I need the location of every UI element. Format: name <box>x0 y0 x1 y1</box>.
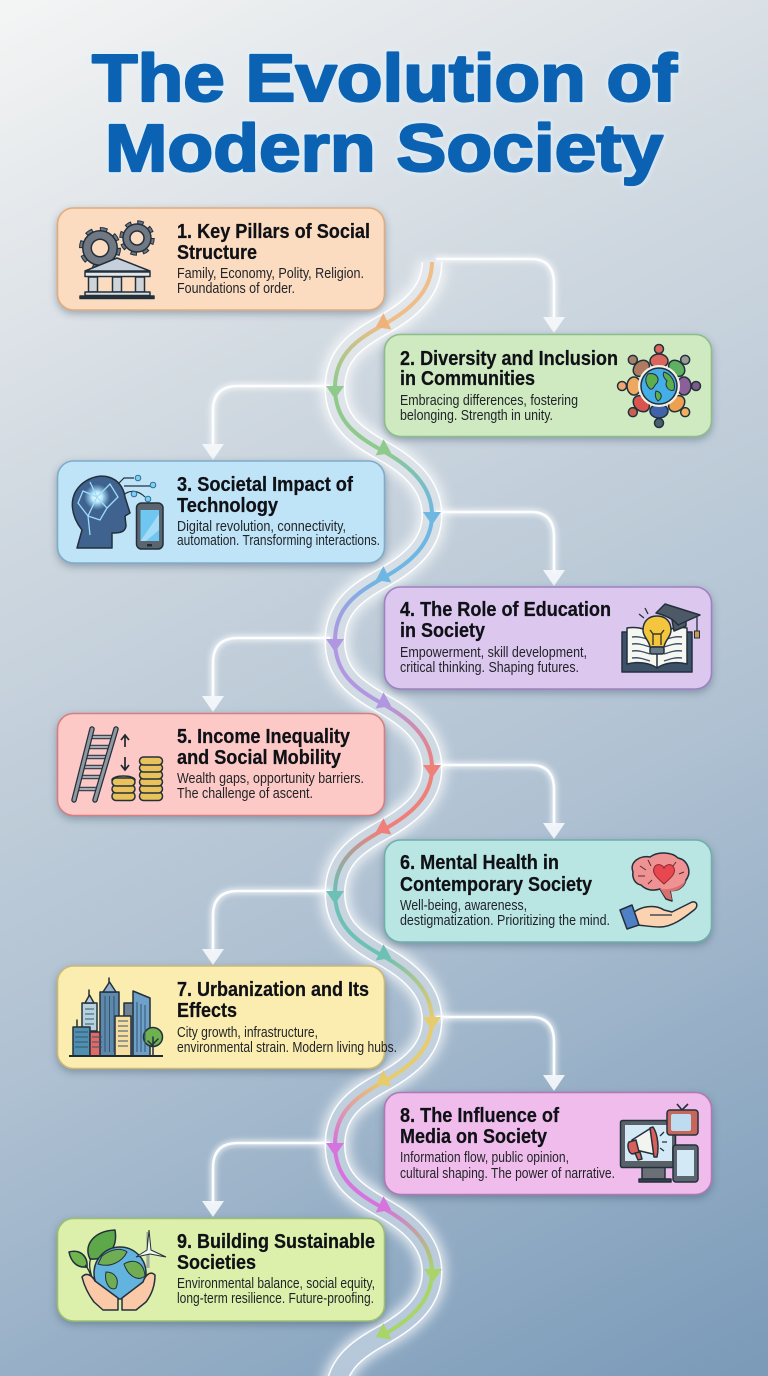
heading <box>177 978 369 1022</box>
title <box>92 41 678 186</box>
panel: 1 Key Pillars <box>58 208 384 310</box>
icon: gears and pillared building <box>80 224 154 298</box>
description: Digital revolution, connectivity, <box>177 519 346 535</box>
heading <box>400 1104 559 1148</box>
heading: 3. Societal Impact of <box>177 473 353 496</box>
heading: 1. Key Pillars of Social <box>177 220 370 243</box>
heading: in Society <box>400 619 486 642</box>
title: The Evolution of <box>92 41 678 116</box>
heading: 4. The Role of Education <box>400 598 611 621</box>
title: Modern Society <box>105 111 663 186</box>
icon: ladder and coin stacks <box>74 729 162 800</box>
icon: city skyline and tree <box>69 978 163 1057</box>
description <box>177 771 364 802</box>
description: Empowerment, skill development, <box>400 645 587 661</box>
heading: Media on Society <box>400 1125 548 1148</box>
icon: book, light bulb and graduation cap <box>622 604 700 672</box>
description: The challenge of ascent. <box>177 786 313 802</box>
description: destigmatization. Prioritizing the mind. <box>400 913 610 929</box>
panel: 2 Diversity and Inclusion <box>384 334 712 436</box>
panel: 9 Sustainable Societies <box>58 1218 384 1321</box>
coloured flow line with arrowheads <box>326 262 442 1345</box>
description: Foundations of order. <box>177 281 295 297</box>
title: The Evolution of <box>92 41 678 116</box>
heading: Contemporary Society <box>400 873 593 896</box>
heading <box>177 1230 375 1274</box>
description: Well-being, awareness, <box>400 898 527 914</box>
description: Embracing differences, fostering <box>400 393 578 409</box>
description <box>400 1150 615 1182</box>
heading: Effects <box>177 999 237 1022</box>
heading <box>177 725 351 769</box>
icon: digital head and smartphone <box>72 475 163 549</box>
heading <box>400 598 611 642</box>
description: belonging. Strength in unity. <box>400 408 553 424</box>
heading: 9. Building Sustainable <box>177 1230 375 1253</box>
winding ribbon path <box>335 262 432 1376</box>
heading: Technology <box>177 494 279 517</box>
description: environmental strain. Modern living hubs. <box>177 1040 397 1056</box>
connector arrows <box>202 259 565 1217</box>
heading: 7. Urbanization and Its <box>177 978 369 1001</box>
heading <box>400 851 593 896</box>
description <box>177 1025 397 1056</box>
panel: 5 Income Inequality <box>58 714 384 816</box>
heading: 6. Mental Health in <box>400 851 559 874</box>
heading: Structure <box>177 241 257 264</box>
heading: Societies <box>177 1251 256 1274</box>
description <box>400 645 587 676</box>
heading: in Communities <box>400 367 535 390</box>
description: Family, Economy, Polity, Religion. <box>177 266 364 282</box>
heading: 8. The Influence of <box>400 1104 559 1127</box>
description: cultural shaping. The power of narrative. <box>400 1166 615 1182</box>
panel: 6 Mental Health <box>384 840 712 942</box>
heading: 5. Income Inequality <box>177 725 351 748</box>
description: City growth, infrastructure, <box>177 1025 318 1041</box>
panel: 8 Media <box>384 1092 712 1194</box>
icon: brain with heart above a hand <box>620 853 697 929</box>
icon: people around a globe <box>618 344 700 428</box>
panel: 7 Urbanization <box>58 966 397 1068</box>
description: Environmental balance, social equity, <box>177 1276 375 1292</box>
description: Information flow, public opinion, <box>400 1150 569 1166</box>
heading: 2. Diversity and Inclusion <box>400 347 618 370</box>
icon: monitor, megaphone, TV and tablet <box>620 1104 698 1182</box>
description <box>400 393 578 424</box>
description: long-term resilience. Future-proofing. <box>177 1291 374 1307</box>
heading <box>177 220 370 264</box>
panel: 4 Education <box>384 587 712 689</box>
description: automation. Transforming interactions. <box>177 533 380 549</box>
description <box>177 1276 375 1307</box>
title: Modern Society <box>105 111 663 186</box>
description <box>177 266 364 297</box>
description: critical thinking. Shaping futures. <box>400 660 579 676</box>
description <box>177 519 380 549</box>
icon: hands holding globe with leaves and turbine <box>69 1230 166 1310</box>
heading <box>177 473 353 517</box>
description: Wealth gaps, opportunity barriers. <box>177 771 364 787</box>
description <box>400 898 610 929</box>
panel: 3 Technology <box>58 461 384 563</box>
heading: and Social Mobility <box>177 746 342 769</box>
heading <box>400 347 618 390</box>
